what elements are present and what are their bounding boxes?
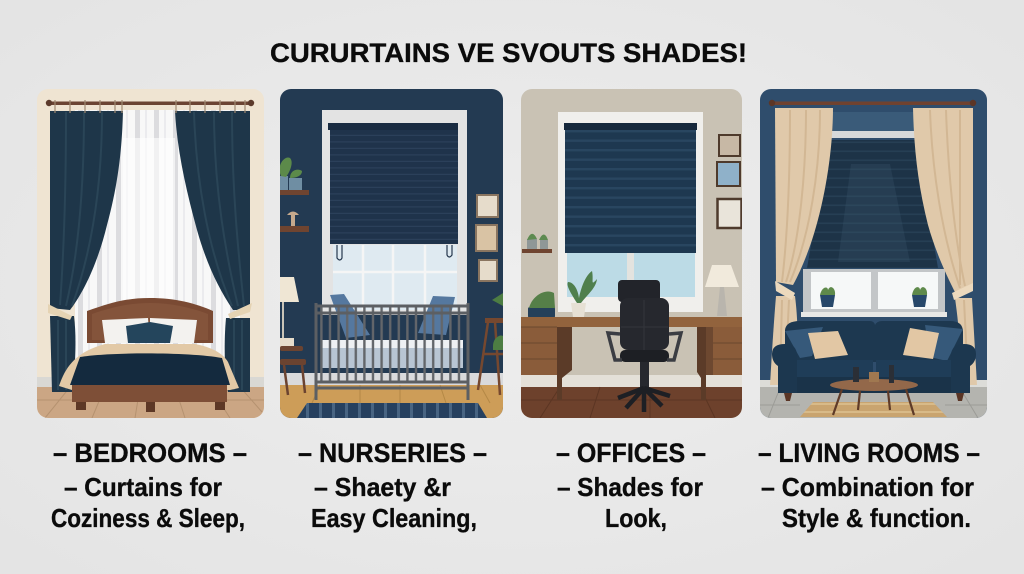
white pillows: [102, 318, 197, 343]
wall frames: [476, 195, 498, 281]
beige pillows: [808, 328, 939, 359]
curtain tie-backs: [48, 303, 252, 320]
right side table with plant: [478, 293, 503, 395]
wall: [760, 89, 987, 418]
curtain rod with rings: [46, 100, 254, 113]
right curtain: [175, 111, 250, 392]
desk plants: [528, 271, 597, 318]
roller shade: [564, 123, 697, 253]
wall: [37, 89, 264, 377]
window glass: [567, 253, 695, 297]
roller blind: [328, 123, 458, 260]
sofa back: [785, 321, 963, 362]
coffee table: [830, 365, 918, 415]
floor: [521, 387, 742, 418]
sofa: [772, 321, 976, 401]
lamp and side table: [280, 277, 306, 395]
headboard inset: [92, 303, 208, 340]
bed legs: [76, 402, 225, 412]
label: bedrooms: [51, 438, 247, 533]
wall: [521, 89, 742, 418]
label: nurseries: [298, 438, 487, 533]
desk: [521, 317, 742, 400]
bed base: [72, 385, 227, 402]
headboard: [87, 298, 213, 343]
offices line 1: – Shades for: [557, 472, 703, 502]
panel: bedroom illustration: [37, 89, 264, 418]
tie-backs: [775, 281, 973, 300]
nurseries heading: – NURSERIES –: [298, 438, 487, 468]
patterned rug: [800, 402, 947, 417]
bedrooms line 1: – Curtains for: [64, 472, 222, 502]
living rooms line 1: – Combination for: [761, 472, 974, 502]
window frame: [558, 112, 703, 312]
living rooms line 2: Style & function.: [782, 503, 971, 533]
panel: living room illustration: [760, 89, 987, 418]
label: living rooms: [758, 438, 980, 533]
shelf with pots: [522, 234, 552, 253]
window with sheer drapes: [75, 110, 240, 382]
floor and baseboard: [760, 380, 987, 418]
window frame: [322, 110, 467, 315]
offices line 2: Look,: [605, 503, 667, 533]
beige blanket: [59, 344, 239, 390]
living rooms heading: – LIVING ROOMS –: [758, 438, 980, 468]
title: CURURTAINS VE SVOUTS SHADES!: [270, 38, 747, 68]
crib rails and posts: [316, 303, 468, 400]
window top frame: [830, 131, 918, 138]
bed: [59, 298, 239, 412]
crib pillows: [330, 294, 370, 338]
right curtain: [913, 108, 977, 385]
navy cushion: [126, 322, 173, 343]
nurseries line 1: – Shaety &r: [314, 472, 451, 502]
desk leg left: [557, 327, 572, 400]
blue throw pillows: [785, 325, 963, 361]
valance band: [833, 112, 915, 132]
seat cushions: [797, 360, 951, 378]
curtain rod: [769, 100, 976, 106]
bedrooms heading: – BEDROOMS –: [53, 438, 247, 468]
left curtain: [50, 111, 123, 392]
nurseries line 2: Easy Cleaning,: [311, 503, 477, 533]
window glass: [333, 245, 457, 310]
baseboard: [521, 375, 742, 388]
baseboard: [280, 373, 503, 386]
bright window centre: [126, 138, 175, 300]
wall frames: [717, 135, 742, 228]
crib: [316, 294, 468, 400]
table lamp: [705, 265, 739, 316]
panel: office illustration: [521, 89, 742, 418]
offices heading: – OFFICES –: [556, 438, 706, 468]
navy duvet: [70, 353, 230, 385]
baseboard: [37, 377, 264, 388]
sofa feet: [784, 393, 964, 401]
office chair: [608, 280, 681, 412]
drawers right: [713, 327, 742, 375]
crib bars: [320, 306, 466, 382]
bedrooms line 2: Coziness & Sleep,: [51, 503, 245, 533]
window plant pots: [820, 287, 927, 307]
drawers left: [521, 327, 557, 375]
window: [801, 269, 947, 317]
arms: [772, 344, 976, 393]
label: offices: [556, 438, 706, 533]
sofa base: [790, 377, 958, 393]
floor: [280, 385, 503, 418]
striped rug: [297, 403, 487, 418]
desk leg right: [697, 327, 706, 400]
panel: nursery illustration: [280, 89, 503, 418]
wooden floor: [37, 387, 264, 418]
left curtain: [770, 108, 833, 385]
wall: [280, 89, 503, 418]
mattress: [322, 348, 463, 368]
combination shade: [807, 140, 938, 268]
wall shelves with plant and ornament: [280, 157, 309, 232]
